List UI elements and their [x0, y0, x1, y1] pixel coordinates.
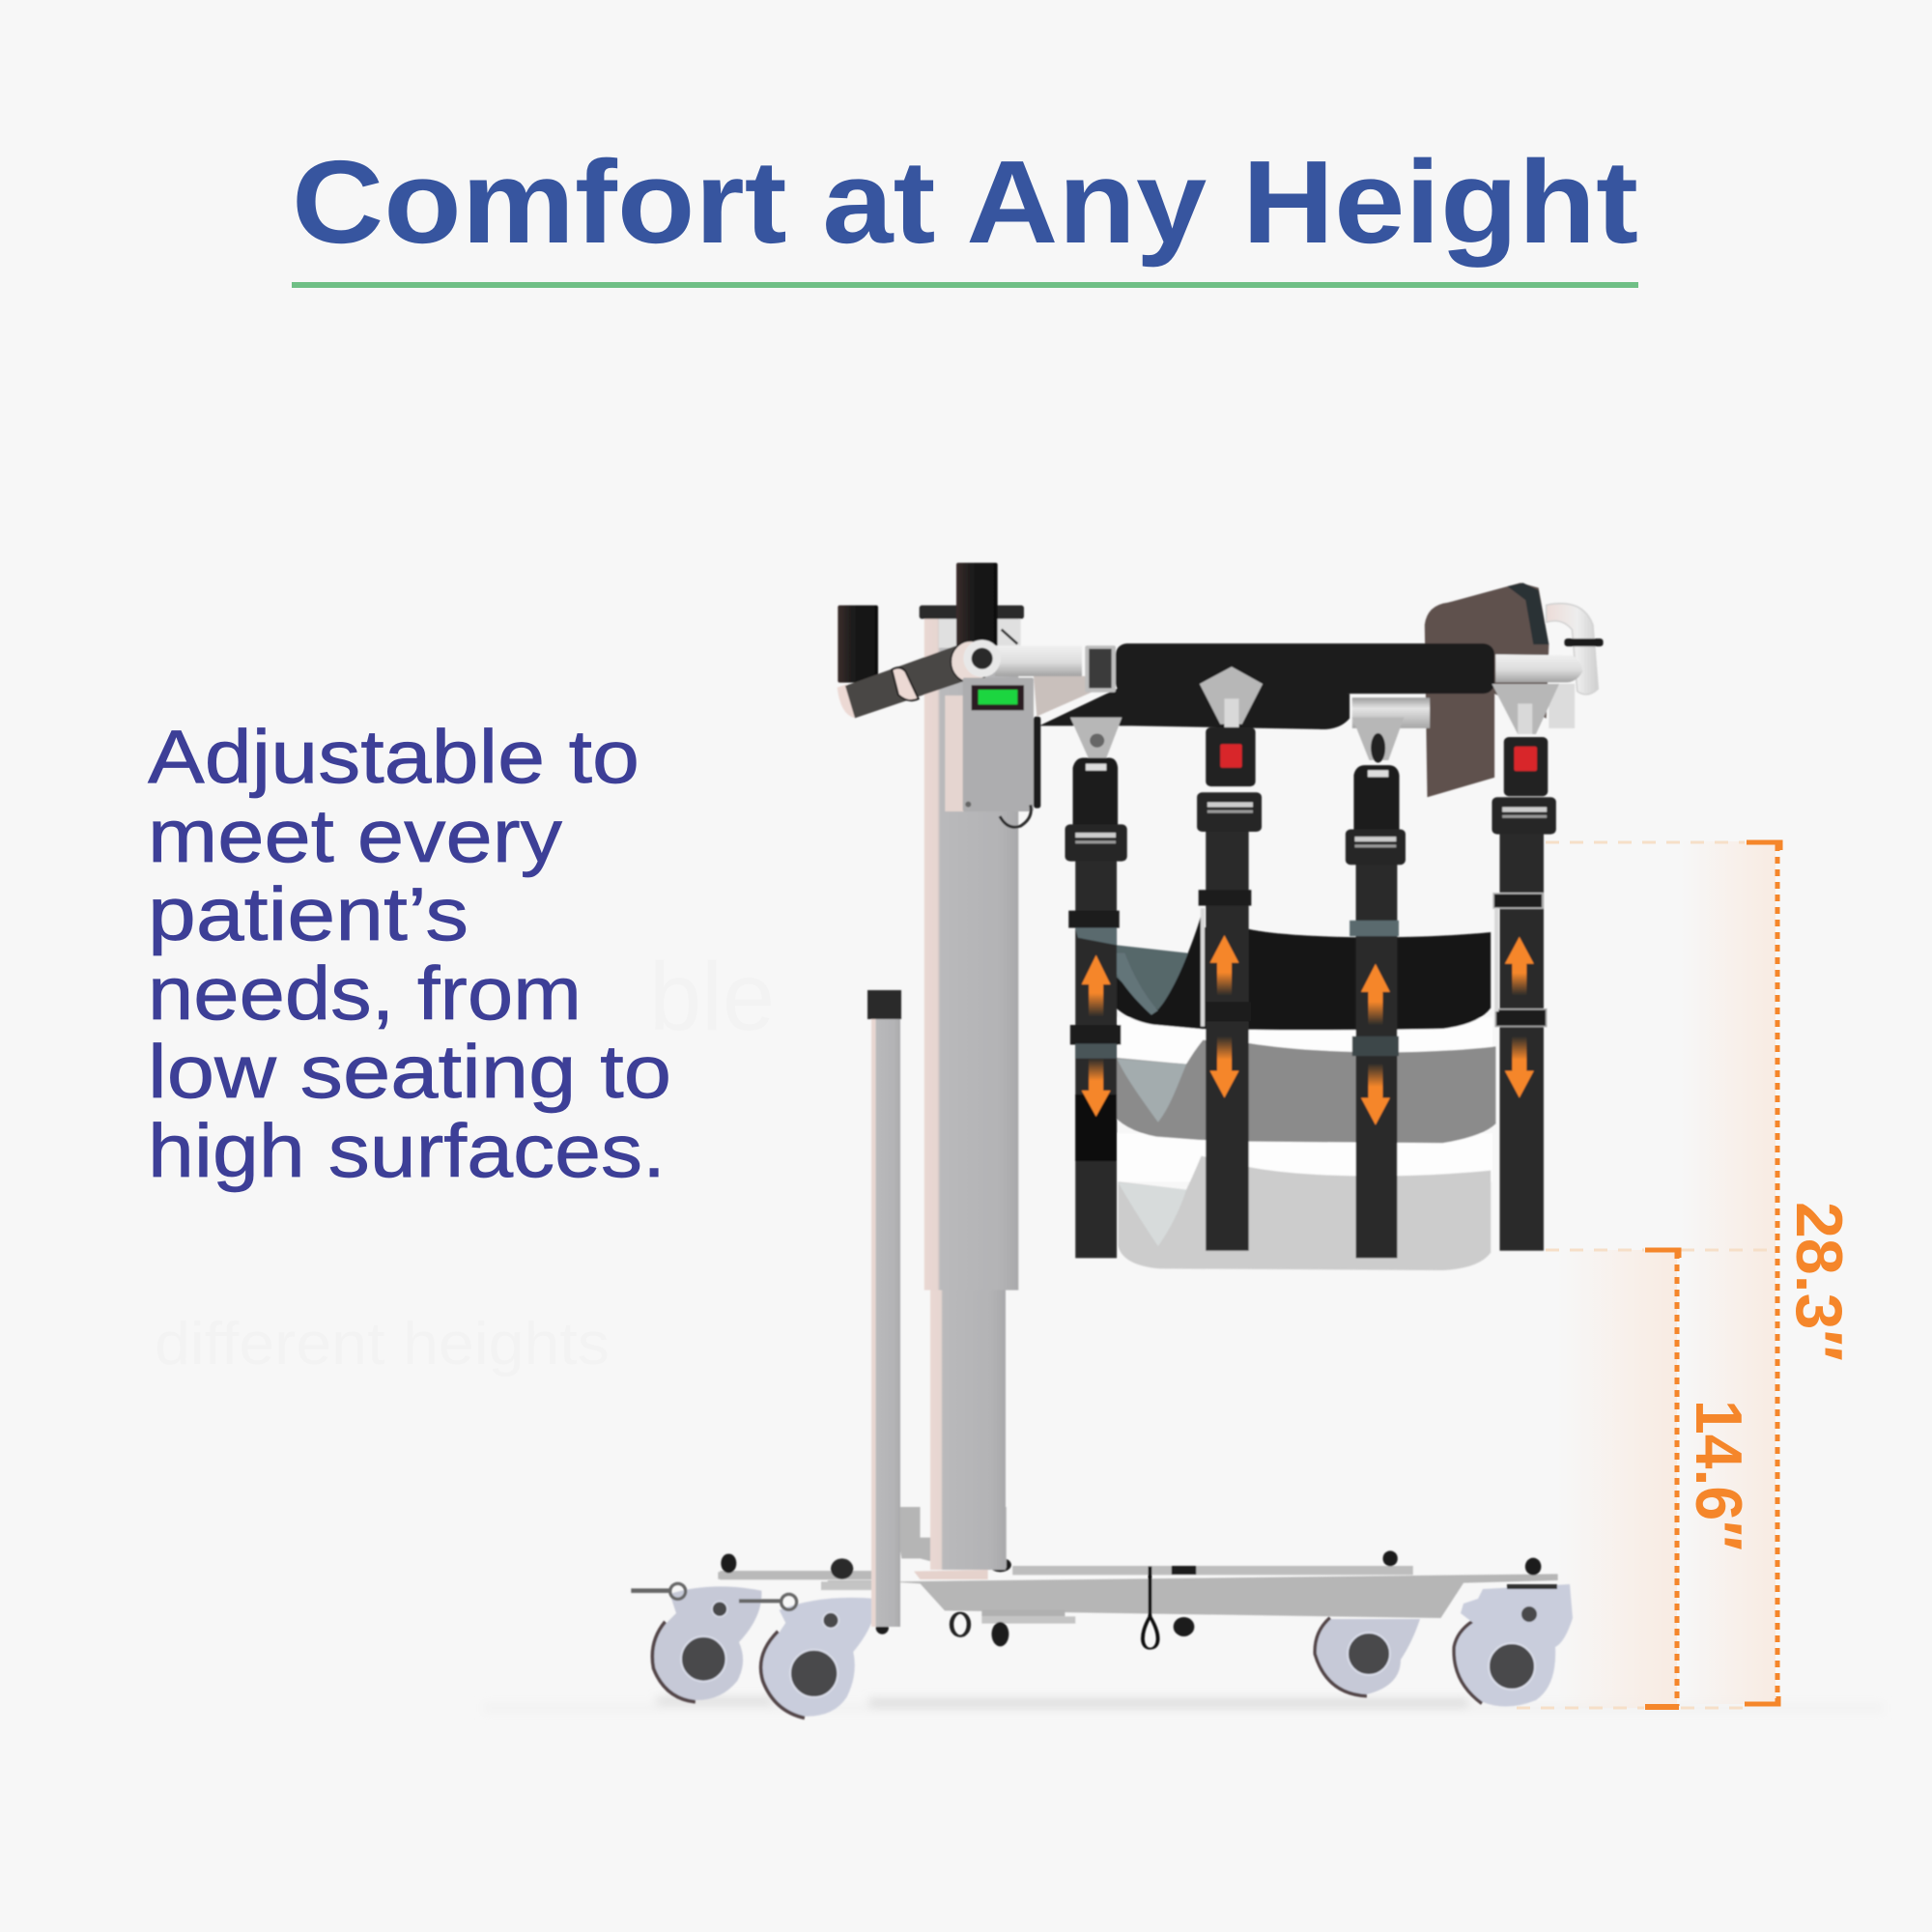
- description text: [148, 714, 671, 1193]
- beam pink detail: [914, 1570, 988, 1579]
- description text: low seating to: [148, 1029, 671, 1114]
- control box: [945, 678, 1040, 827]
- control side assembly: [838, 563, 1116, 827]
- wheel 2: [739, 1594, 876, 1717]
- white gap backing: [1118, 1017, 1492, 1181]
- under-tube panel: [1034, 676, 1092, 717]
- height measurement guides: [1517, 841, 1856, 1708]
- down arrows: [1082, 1037, 1534, 1125]
- white pipe elbow: [1547, 604, 1604, 728]
- rear rails: [720, 1566, 1413, 1587]
- horizontal tube left: [995, 645, 1082, 676]
- tall handle cylinder: [956, 563, 998, 646]
- main base beam: [890, 1574, 1558, 1618]
- upper assembly: column, pad and pipes: [924, 582, 1604, 1291]
- strap 3: [1346, 718, 1406, 1258]
- strap 4: [1492, 684, 1559, 1251]
- angled grip bar: [838, 645, 969, 718]
- title underline: [292, 282, 1638, 288]
- bracket: 28.3 in: [1745, 842, 1780, 1704]
- carabiner: [952, 1613, 969, 1636]
- seat: middle position ghost: [1110, 1040, 1495, 1143]
- column top: [939, 619, 1021, 648]
- ghost text behind the description: different heights: [155, 1311, 610, 1378]
- screws: [965, 802, 971, 808]
- strap 1: [1065, 718, 1127, 1258]
- front left wheels: [631, 1553, 889, 1717]
- description text: patient’s: [148, 871, 469, 956]
- side cable: [1034, 717, 1040, 809]
- bracket: 14.6 in: [1645, 1250, 1679, 1707]
- floor shadow: [483, 1698, 1884, 1712]
- description text: high surfaces.: [148, 1108, 666, 1193]
- glow: 14.6 range: [1557, 1250, 1677, 1708]
- hanging cord: [1143, 1567, 1158, 1649]
- upper assembly: straps and arrows: [1065, 667, 1559, 1258]
- description text: Adjustable to: [148, 714, 639, 799]
- angle bracket: [893, 1507, 939, 1563]
- rear right wheel: [1317, 1619, 1420, 1694]
- wheel 1: [631, 1583, 761, 1700]
- front right wheel: [1456, 1584, 1573, 1707]
- base frame: [720, 1507, 1558, 1649]
- label: 14.6 in: 14.6″: [1682, 1400, 1755, 1550]
- push pole cap: [867, 990, 901, 1019]
- battery display: [972, 685, 1024, 710]
- rear rail and knobs: [718, 1553, 889, 1634]
- patient lift machine: [631, 563, 1604, 1717]
- strap 2: [1197, 667, 1263, 1251]
- glow: 28.3 range: [1681, 841, 1776, 1704]
- sling seat positions: [1078, 911, 1495, 1270]
- column top cap: [920, 606, 1024, 619]
- d-ring: [1000, 805, 1031, 827]
- up arrows: [1082, 935, 1534, 1025]
- description text: needs, from: [148, 951, 582, 1036]
- ghost text behind the description: ble: [649, 943, 775, 1051]
- description text: meet every: [148, 793, 562, 878]
- dashed horizontal guides: [1517, 842, 1776, 1708]
- small diagonal stay: [1002, 630, 1017, 644]
- pivot knob: [951, 639, 1001, 683]
- main padded armrest: [1116, 643, 1494, 694]
- lower pad: [1039, 687, 1350, 729]
- lower plate: [981, 1610, 1075, 1624]
- inner column foot: [932, 1507, 1007, 1568]
- arm bracket: [1085, 645, 1116, 693]
- black knobs and bolts: [989, 1550, 1541, 1646]
- inner telescopic column: [930, 1290, 1006, 1570]
- main column: [924, 617, 1018, 1291]
- seat: lowest position ghost: [1118, 1156, 1491, 1270]
- ghost text behind the description: [155, 943, 775, 1378]
- title: Comfort at Any Height: [292, 136, 1638, 268]
- lower cross tube: [1352, 697, 1430, 728]
- rear push pole: [871, 1018, 900, 1627]
- label: 28.3 in: 28.3″: [1782, 1202, 1856, 1361]
- horizontal tube right: [1495, 654, 1582, 682]
- left handle cylinder: [838, 606, 878, 683]
- back pad: [1425, 582, 1548, 797]
- seat teal flap: [1078, 937, 1188, 1009]
- seat: top position: [1078, 911, 1491, 1030]
